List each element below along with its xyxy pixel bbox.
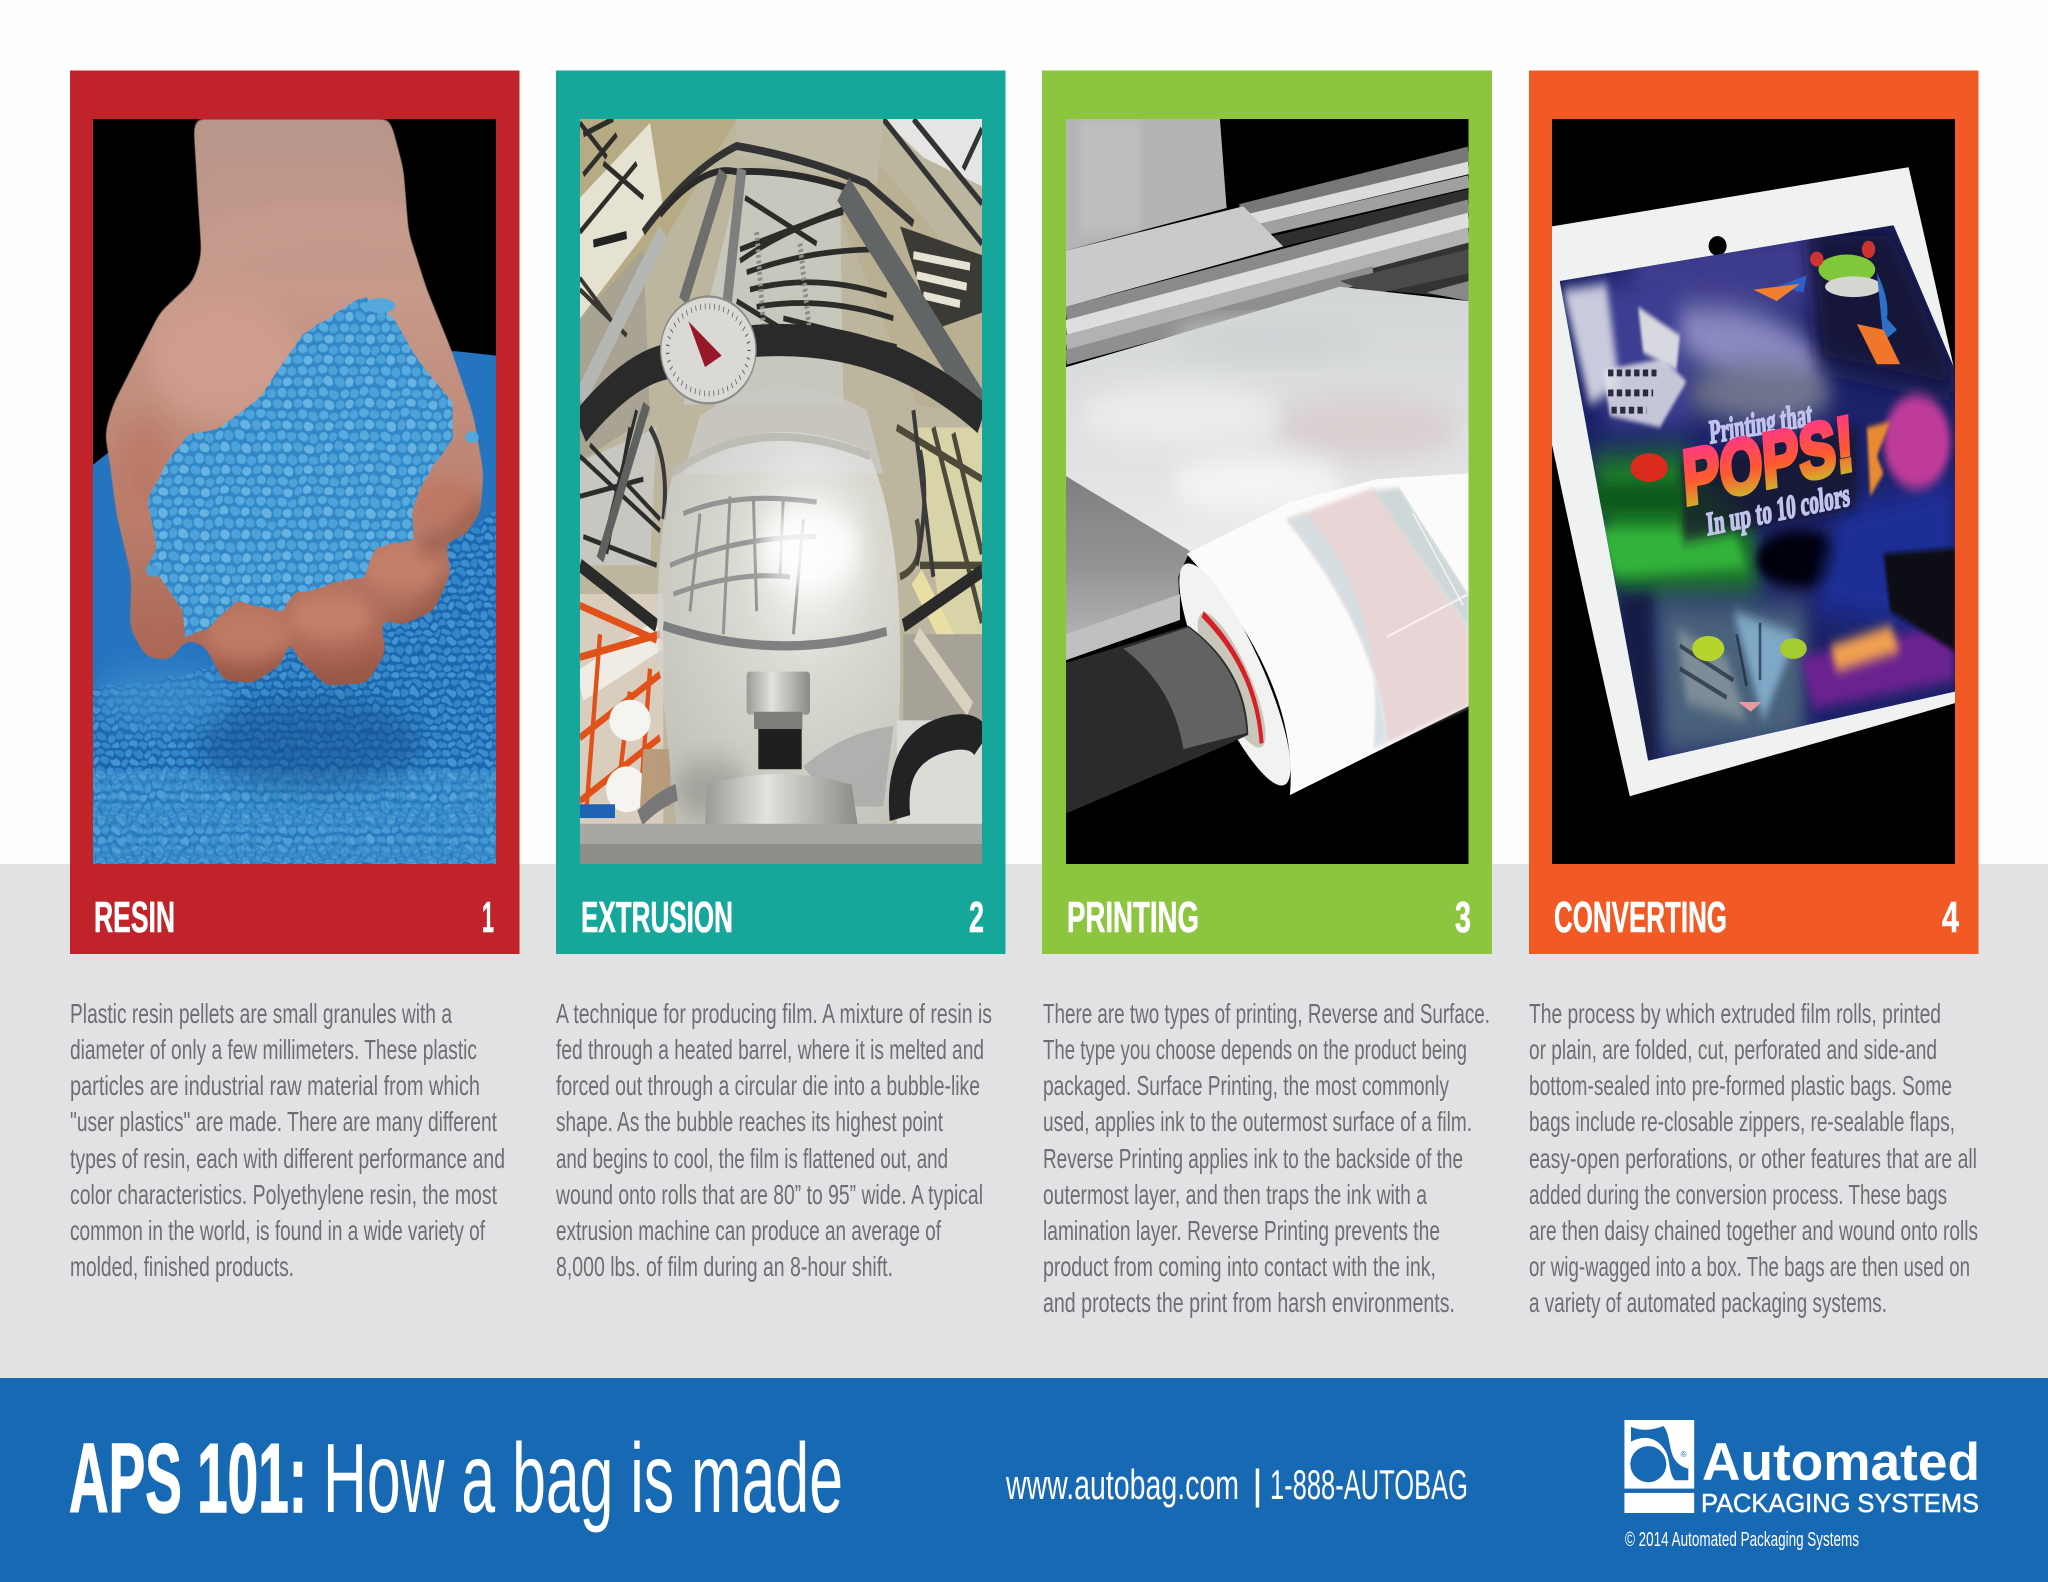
footer bar xyxy=(0,1378,2048,1582)
hand xyxy=(105,119,484,686)
text block: extrusion xyxy=(555,998,992,1282)
heading: CONVERTING: CONVERTING xyxy=(1554,893,1727,942)
bag slogan: In up to 10 colors xyxy=(1705,476,1851,543)
logo mark xyxy=(1624,1420,1694,1513)
frog xyxy=(1753,241,1900,364)
pellet mound xyxy=(146,295,479,637)
grey band xyxy=(0,864,2048,1378)
bag slogan xyxy=(1680,396,1857,543)
text block: converting: a variety of automated packaging systems. xyxy=(1529,1287,1887,1318)
panel: resin xyxy=(70,70,520,954)
text block: extrusion: fed through a heated barrel, where it is melted and xyxy=(556,1034,984,1065)
core and cylinder xyxy=(1066,597,1276,813)
text block: printing: There are two types of printing, Reverse and Surface. xyxy=(1043,998,1490,1029)
footer title xyxy=(69,1423,843,1533)
footer title: How a bag is made xyxy=(323,1423,843,1533)
text block: resin: color characteristics. Polyethylene resin, the most xyxy=(70,1179,497,1210)
die assembly xyxy=(705,672,893,830)
text block: extrusion: 8,000 lbs. of film during an 8-hour shift. xyxy=(556,1251,893,1282)
text block: printing: The type you choose depends on the product being xyxy=(1043,1034,1467,1065)
text block: resin: "user plastics" are made. There are many different xyxy=(70,1106,497,1137)
photo: hand holding blue resin pellets xyxy=(93,119,496,864)
photo: printed plastic bag xyxy=(1552,119,1955,864)
text block: printing xyxy=(1043,998,1490,1318)
text block: extrusion: shape. As the bubble reaches its highest point xyxy=(556,1106,943,1137)
text block: printing: used, applies ink to the outermost surface of a film. xyxy=(1043,1106,1472,1137)
text block: resin: common in the world, is found in a wide variety of xyxy=(70,1215,485,1246)
ladybug xyxy=(1630,453,1668,482)
text block: extrusion: extrusion machine can produce an average of xyxy=(556,1215,941,1246)
step number 4: 4 xyxy=(1942,893,1959,942)
heading: EXTRUSION: EXTRUSION xyxy=(581,893,733,942)
text block: extrusion: and begins to cool, the film is flattened out, and xyxy=(556,1143,948,1174)
logo sub-wordmark: PACKAGING SYSTEMS xyxy=(1701,1488,1979,1518)
logo mark: ® xyxy=(1681,1450,1687,1459)
step number 3: 3 xyxy=(1455,893,1471,942)
text block: printing: product from coming into contact with the ink, xyxy=(1043,1251,1436,1282)
panel: converting xyxy=(1529,70,1978,954)
orange racks xyxy=(580,594,670,824)
footer title: APS 101: xyxy=(69,1423,307,1533)
heading: PRINTING: PRINTING xyxy=(1067,893,1199,942)
text block: printing: lamination layer. Reverse Printing prevents the xyxy=(1043,1215,1440,1246)
panel: printing xyxy=(1042,70,1492,954)
copyright: © 2014 Automated Packaging Systems xyxy=(1625,1529,1859,1551)
text block: resin: types of resin, each with different performance and xyxy=(70,1143,505,1174)
lower roller xyxy=(1066,206,1468,357)
logo: Automated Packaging Systems xyxy=(1624,1420,1980,1518)
heading: RESIN: RESIN xyxy=(94,893,175,942)
cat eyes and nose xyxy=(1692,636,1807,712)
bag slogan: POPS! xyxy=(1680,401,1857,522)
film bubble xyxy=(657,432,900,827)
contact line: | xyxy=(1252,1461,1263,1508)
film web xyxy=(1066,287,1468,634)
text block: resin: molded, finished products. xyxy=(70,1251,294,1282)
text block: resin xyxy=(70,998,505,1282)
text block: extrusion: A technique for producing film. A mixture of resin is xyxy=(556,998,992,1029)
bag print artwork xyxy=(1552,221,1955,772)
text block: printing: packaged. Surface Printing, the most commonly xyxy=(1043,1070,1449,1101)
logo wordmark: Automated xyxy=(1702,1433,1980,1492)
text block: printing: and protects the print from harsh environments. xyxy=(1043,1287,1455,1318)
contact line: 1-888-AUTOBAG xyxy=(1270,1461,1468,1508)
text block: converting xyxy=(1529,998,1978,1318)
upper roller xyxy=(1240,155,1468,242)
text block: resin: diameter of only a few millimeters. These plastic xyxy=(70,1034,477,1065)
photo: printed film on roller xyxy=(1066,119,1468,864)
panel: resin: 1 xyxy=(482,893,494,942)
roll of film xyxy=(1066,473,1468,813)
text block: printing: outermost layer, and then traps the ink with a xyxy=(1043,1179,1427,1210)
text block: resin: Plastic resin pellets are small granules with a xyxy=(70,998,452,1029)
text block: extrusion: wound onto rolls that are 80” to 95” wide. A typical xyxy=(555,1179,983,1210)
dial gauge xyxy=(661,296,756,403)
text block: printing: Reverse Printing applies ink to the backside of the xyxy=(1043,1143,1463,1174)
text block: resin: particles are industrial raw material from which xyxy=(70,1070,480,1101)
bag slogan: Printing that xyxy=(1708,396,1813,451)
text block: extrusion: forced out through a circular die into a bubble-like xyxy=(556,1070,980,1101)
step number 2: 2 xyxy=(969,893,984,942)
photo: blown film extrusion tower xyxy=(580,119,982,864)
panel: extrusion xyxy=(556,70,1006,954)
contact line: www.autobag.com xyxy=(1005,1461,1239,1508)
